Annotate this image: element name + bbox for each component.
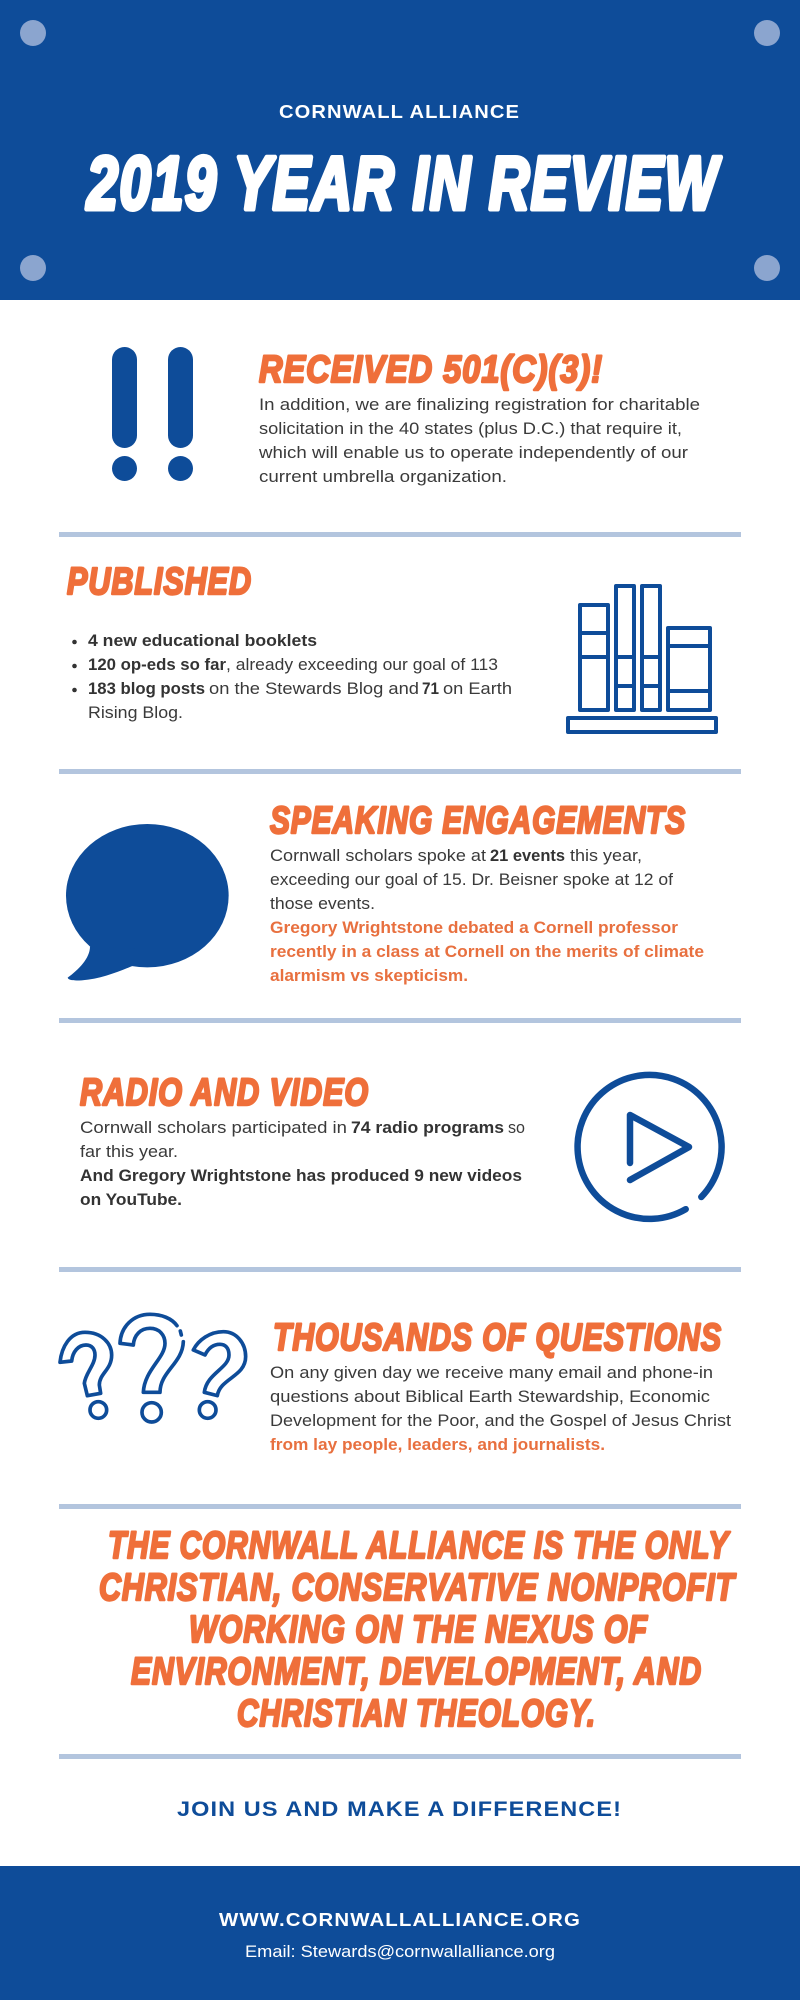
icon: question marks [60,1314,246,1422]
icon: speech bubble [66,824,229,980]
body text: speaking: 21 events [490,846,565,865]
bulleted list: 183 blog posts [88,679,205,698]
panel: published [67,561,716,732]
closing statement: CHRISTIAN THEOLOGY. [237,1693,596,1735]
body text: speaking [270,846,704,985]
heading: speaking engagements: SPEAKING ENGAGEMENTS [270,800,686,842]
heading: received: RECEIVED 501(C)(3)! [259,349,603,391]
bulleted list: on Earth [443,679,512,698]
body text: questions: On any given day we receive many email and phone-in [270,1363,713,1382]
body text: radio [80,1118,525,1209]
body text: questions: from lay people, leaders, and journalists. [270,1435,605,1454]
body text: speaking: alarmism vs skepticism. [270,966,468,985]
body text: received: which will enable us to operate independently of our [258,443,688,462]
bulleted list: on the Stewards Blog and [209,679,419,698]
footer panel [0,1866,800,2000]
body text: questions: questions about Biblical Earth Stewardship, Economic [270,1387,711,1406]
body text: speaking: this year, [570,846,642,865]
body text: received: solicitation in the 40 states (plus D.C.) that require it, [259,419,682,438]
body text: radio: far this year. [80,1142,178,1161]
body text: radio: so [508,1118,525,1137]
bulleted list: , already exceeding our goal of 113 [226,655,498,674]
bulleted list: Rising Blog. [88,703,183,722]
header corner dots [20,20,780,281]
bulleted list: 71 [422,679,439,698]
bulleted list: 4 new educational booklets [88,631,317,650]
footer website: WWW.CORNWALLALLIANCE.ORG [219,1909,581,1930]
footer email: Email: Stewards@cornwallalliance.org [245,1942,555,1961]
call to action: JOIN US AND MAKE A DIFFERENCE! [177,1797,622,1821]
icon: books on shelf [568,586,716,732]
body text: speaking: recently in a class at Cornell on the merits of climate [270,942,704,961]
body text: radio: And Gregory Wrightstone has produced 9 new videos [80,1166,522,1185]
body text: received [258,395,700,486]
panel: received 501(c)(3) [112,347,700,486]
header panel [0,0,800,300]
closing statement [99,1525,736,1735]
body text: speaking: Cornwall scholars spoke at [270,846,486,865]
bulleted list [72,631,512,722]
body text: questions [270,1363,731,1454]
panel: speaking engagements [66,800,704,985]
body text: received: In addition, we are finalizing registration for charitable [259,395,700,414]
header organisation name: CORNWALL ALLIANCE [279,101,520,122]
heading: published: PUBLISHED [67,561,252,603]
icon: play button [578,1075,722,1219]
heading: radio and video: RADIO AND VIDEO [80,1072,369,1114]
body text: radio: Cornwall scholars participated in [80,1118,347,1137]
bulleted list: 120 op-eds so far [88,655,226,674]
body text: speaking: Gregory Wrightstone debated a Cornell professor [270,918,678,937]
body text: questions: Development for the Poor, and the Gospel of Jesus Christ [270,1411,731,1430]
body text: speaking: exceeding our goal of 15. Dr. Beisner spoke at 12 of [270,870,673,889]
panel: radio and video [80,1072,722,1219]
body text: received: current umbrella organization. [259,467,507,486]
panel: thousands of questions [60,1314,731,1454]
body text: radio: 74 radio programs [351,1118,504,1137]
icon: double exclamation [112,347,193,481]
closing statement: WORKING ON THE NEXUS OF [189,1609,649,1651]
body text: radio: on YouTube. [80,1190,182,1209]
body text: speaking: those events. [270,894,375,913]
